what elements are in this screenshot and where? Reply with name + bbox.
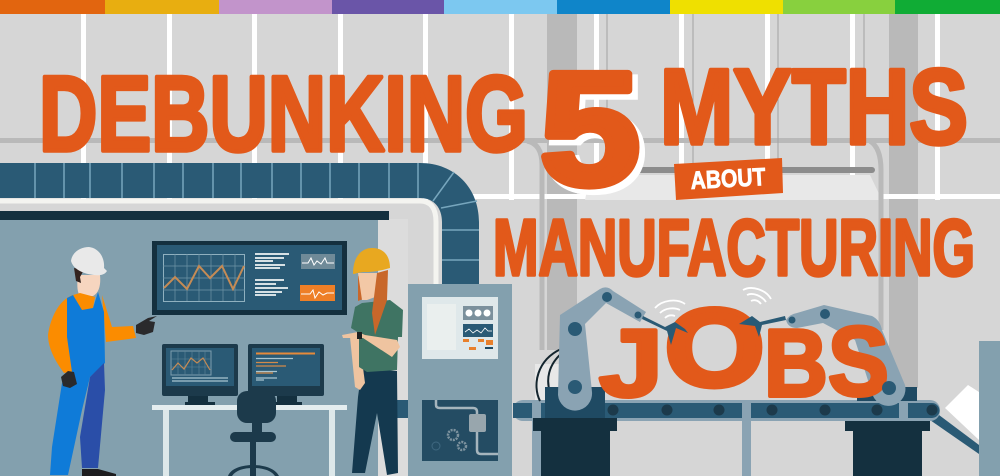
- dashboard text lines: [255, 254, 289, 295]
- robot joint over lettering: [882, 381, 896, 395]
- cabinet dials: [463, 306, 493, 320]
- cabinet machinery panel: [422, 400, 498, 461]
- JOBS wordmark: [599, 287, 889, 417]
- cabinet screen panel: [422, 297, 498, 359]
- right wall column and chute: [930, 341, 1000, 476]
- grey waveform tile: [301, 254, 335, 269]
- conveyor belt: [513, 400, 940, 476]
- control cabinet: [408, 280, 512, 476]
- air duct: [0, 163, 479, 290]
- JOBS wordmark: O: [665, 287, 764, 410]
- worker with yellow hard hat: [342, 248, 403, 475]
- about tag: ABOUT: [690, 163, 766, 195]
- desk with monitors: [152, 344, 347, 476]
- left robot arm: [533, 287, 646, 476]
- JOBS wordmark: S: [828, 307, 889, 417]
- right robot arm: [786, 305, 930, 476]
- office chair: [228, 391, 279, 476]
- about tag: [674, 158, 783, 200]
- control room wall: [0, 211, 408, 476]
- wall dashboard screen: [152, 241, 347, 315]
- orange waveform tile: [300, 285, 335, 301]
- JOBS wordmark: B: [764, 310, 828, 417]
- desk legs: [163, 410, 335, 476]
- desk top: [152, 405, 347, 410]
- cabinet status blocks: [463, 339, 493, 350]
- colour strip: [0, 0, 1000, 14]
- right monitor: [248, 344, 324, 405]
- left monitor: [162, 344, 238, 405]
- JOBS wordmark: J: [599, 310, 663, 417]
- cabinet waveform: [463, 324, 493, 337]
- large number 5: 5: [540, 39, 640, 218]
- title: debunking: DEBUNKING: [39, 54, 528, 174]
- left gripper: [642, 316, 688, 345]
- wifi signals: [655, 288, 771, 318]
- large number 5: 5: [545, 44, 645, 223]
- worker in blue overalls: [48, 247, 157, 476]
- right gripper: [739, 316, 786, 337]
- dashboard line chart: [163, 254, 245, 302]
